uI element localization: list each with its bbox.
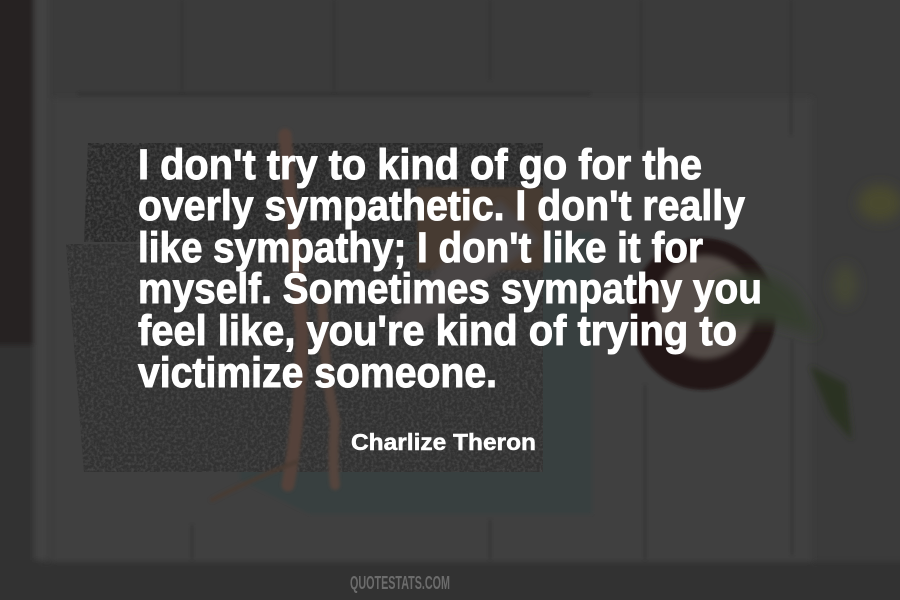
quote text: victimize someone. bbox=[138, 349, 497, 397]
author name: Charlize Theron bbox=[351, 429, 536, 455]
plant leaves bbox=[712, 185, 900, 440]
quote text: overly sympathetic. I don't really bbox=[138, 182, 745, 230]
folded towels bbox=[66, 143, 592, 514]
watermark: QUOTESTATS.COM bbox=[350, 573, 450, 593]
quote text: myself. Sometimes sympathy you bbox=[138, 265, 762, 313]
quote text: I don't try to kind of go for the bbox=[138, 141, 702, 189]
bowl bbox=[630, 238, 776, 390]
twine bbox=[212, 135, 335, 500]
quote text: like sympathy; I don't like it for bbox=[138, 224, 703, 272]
quote text: feel like, you're kind of trying to bbox=[138, 307, 737, 355]
quote text bbox=[138, 141, 762, 397]
